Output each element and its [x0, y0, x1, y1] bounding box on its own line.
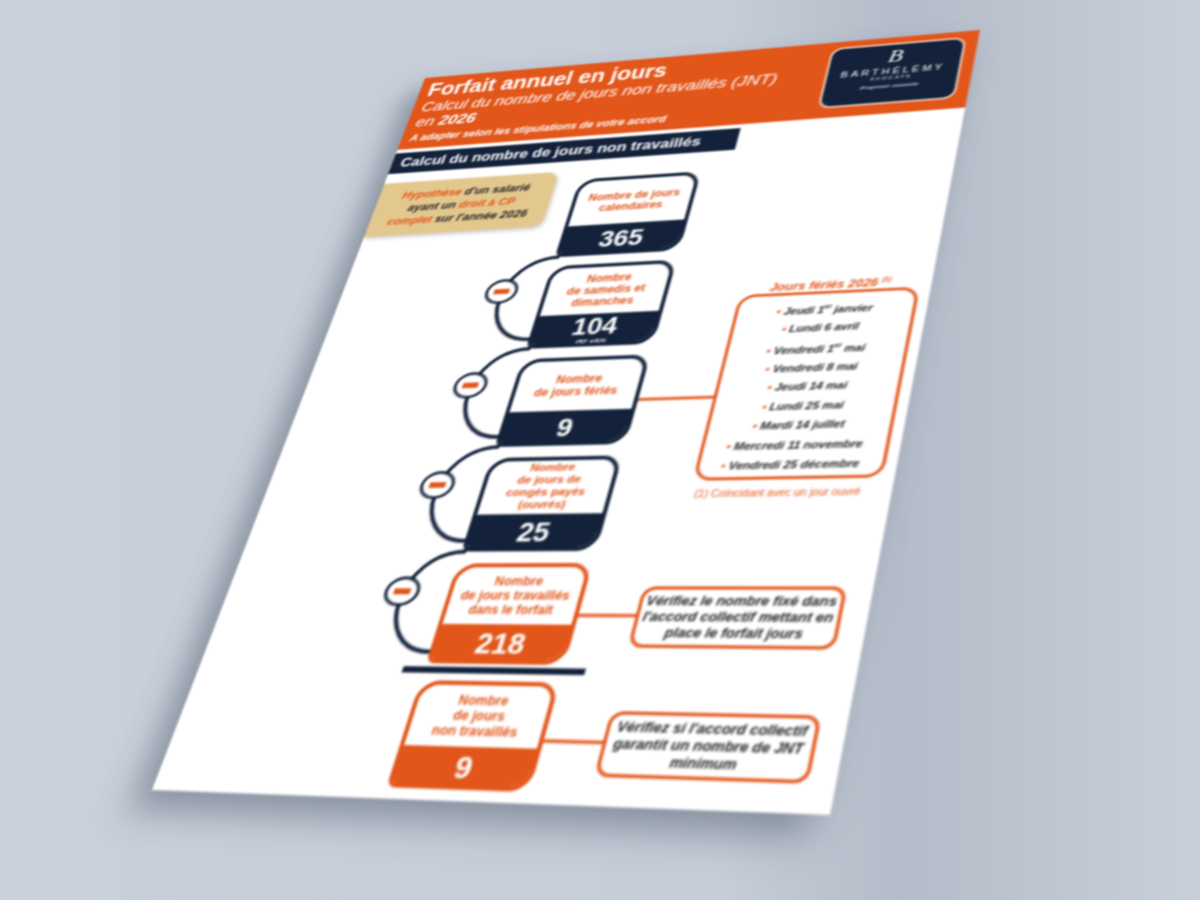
hypothesis box	[364, 172, 559, 237]
box: weekends: (52 +52)	[574, 337, 607, 346]
logo: AVOCATS	[870, 74, 912, 82]
box: weekends: 104	[569, 312, 621, 340]
holidays list: • Lundi 25 mai	[761, 400, 845, 413]
box: weekends: dimanches	[570, 294, 635, 309]
hypothesis box: complet sur l'année 2026	[385, 207, 529, 227]
box: non-worked days: 9	[450, 751, 477, 785]
logo: BARTHÉLÉMY	[840, 63, 946, 80]
callout: check minimum JNT	[594, 711, 822, 784]
box: holidays	[494, 354, 651, 447]
holidays list: Jours fériés 2026 (1)	[768, 276, 892, 294]
separator	[403, 669, 585, 672]
logo: B	[886, 46, 905, 67]
page	[152, 30, 980, 815]
box: paid leave: (ouvrés)	[516, 499, 567, 511]
box: holidays: de jours fériés	[532, 384, 619, 399]
holidays list: • Vendredi 8 mai	[764, 361, 859, 375]
box: paid leave: congés payés	[504, 486, 587, 499]
subtitle: en 2026	[413, 111, 478, 130]
box: worked days: dans le forfait	[467, 603, 555, 617]
box: weekends	[526, 260, 677, 349]
callout: check minimum JNT: Vérifiez si l'accord collectif garantit un nombre de JNT minimum	[612, 718, 809, 772]
subtitle: Calcul du nombre de jours non travaillés (JNT)	[419, 71, 779, 115]
holidays list: • Jeudi 1er janvier	[775, 303, 874, 317]
box: worked days	[426, 563, 593, 665]
box: non-worked days: non travaillés	[430, 723, 520, 740]
section banner: Calcul du nombre de jours non travaillés	[398, 134, 703, 170]
box: worked days: Nombre	[493, 574, 545, 588]
footnote: (1) Coïncidant avec un jour ouvré	[693, 487, 861, 500]
box: worked days: 218	[471, 628, 529, 660]
holidays list: • Vendredi 1er mai	[765, 342, 866, 357]
connectors	[392, 254, 716, 746]
box: paid leave: Nombre	[529, 462, 577, 474]
holidays list: • Mardi 14 juillet	[751, 419, 846, 433]
callout: check fixed number	[628, 586, 847, 650]
logo: Progresser ensemble	[859, 80, 919, 91]
box: paid leave: 25	[513, 518, 554, 547]
box: holidays: 9	[553, 414, 576, 442]
holidays list: • Lundi 6 avril	[781, 321, 860, 335]
callout: check fixed number: Vérifiez le nombre fixé dans l'accord collectif mettant en place le forfait jours	[641, 593, 839, 641]
box: calendar days: Nombre de jours	[587, 187, 682, 203]
section banner	[388, 128, 741, 174]
box: non-worked days: Nombre	[457, 693, 511, 709]
logo	[818, 37, 967, 109]
box: non-worked days	[386, 680, 560, 792]
holidays list	[694, 276, 920, 482]
box: weekends: de samedis et	[565, 282, 647, 297]
box: paid leave: de jours de	[516, 474, 583, 487]
title: Forfait annuel en jours	[425, 60, 670, 100]
box: non-worked days: de jours	[451, 708, 507, 724]
holidays list: • Jeudi 14 mai	[766, 380, 848, 394]
note: A adapter selon les stipulations de votre accord	[408, 114, 668, 143]
box: calendar days: calendaires	[597, 199, 664, 214]
box: calendar days: 365	[596, 225, 647, 252]
box: calendar days	[555, 171, 701, 257]
header band	[397, 30, 980, 150]
holidays list: • Mercredi 11 novembre	[725, 438, 864, 453]
box: holidays: Nombre	[555, 372, 604, 386]
box: worked days: de jours travaillés	[459, 588, 572, 603]
box: paid leave	[461, 455, 623, 552]
box: weekends: Nombre	[585, 271, 633, 285]
hypothesis box: ayant un droit à CP	[406, 195, 517, 213]
minus icons	[382, 278, 520, 608]
holidays list: • Vendredi 25 décembre	[719, 458, 860, 473]
hypothesis box: Hypothèse d'un salarié	[401, 181, 532, 201]
